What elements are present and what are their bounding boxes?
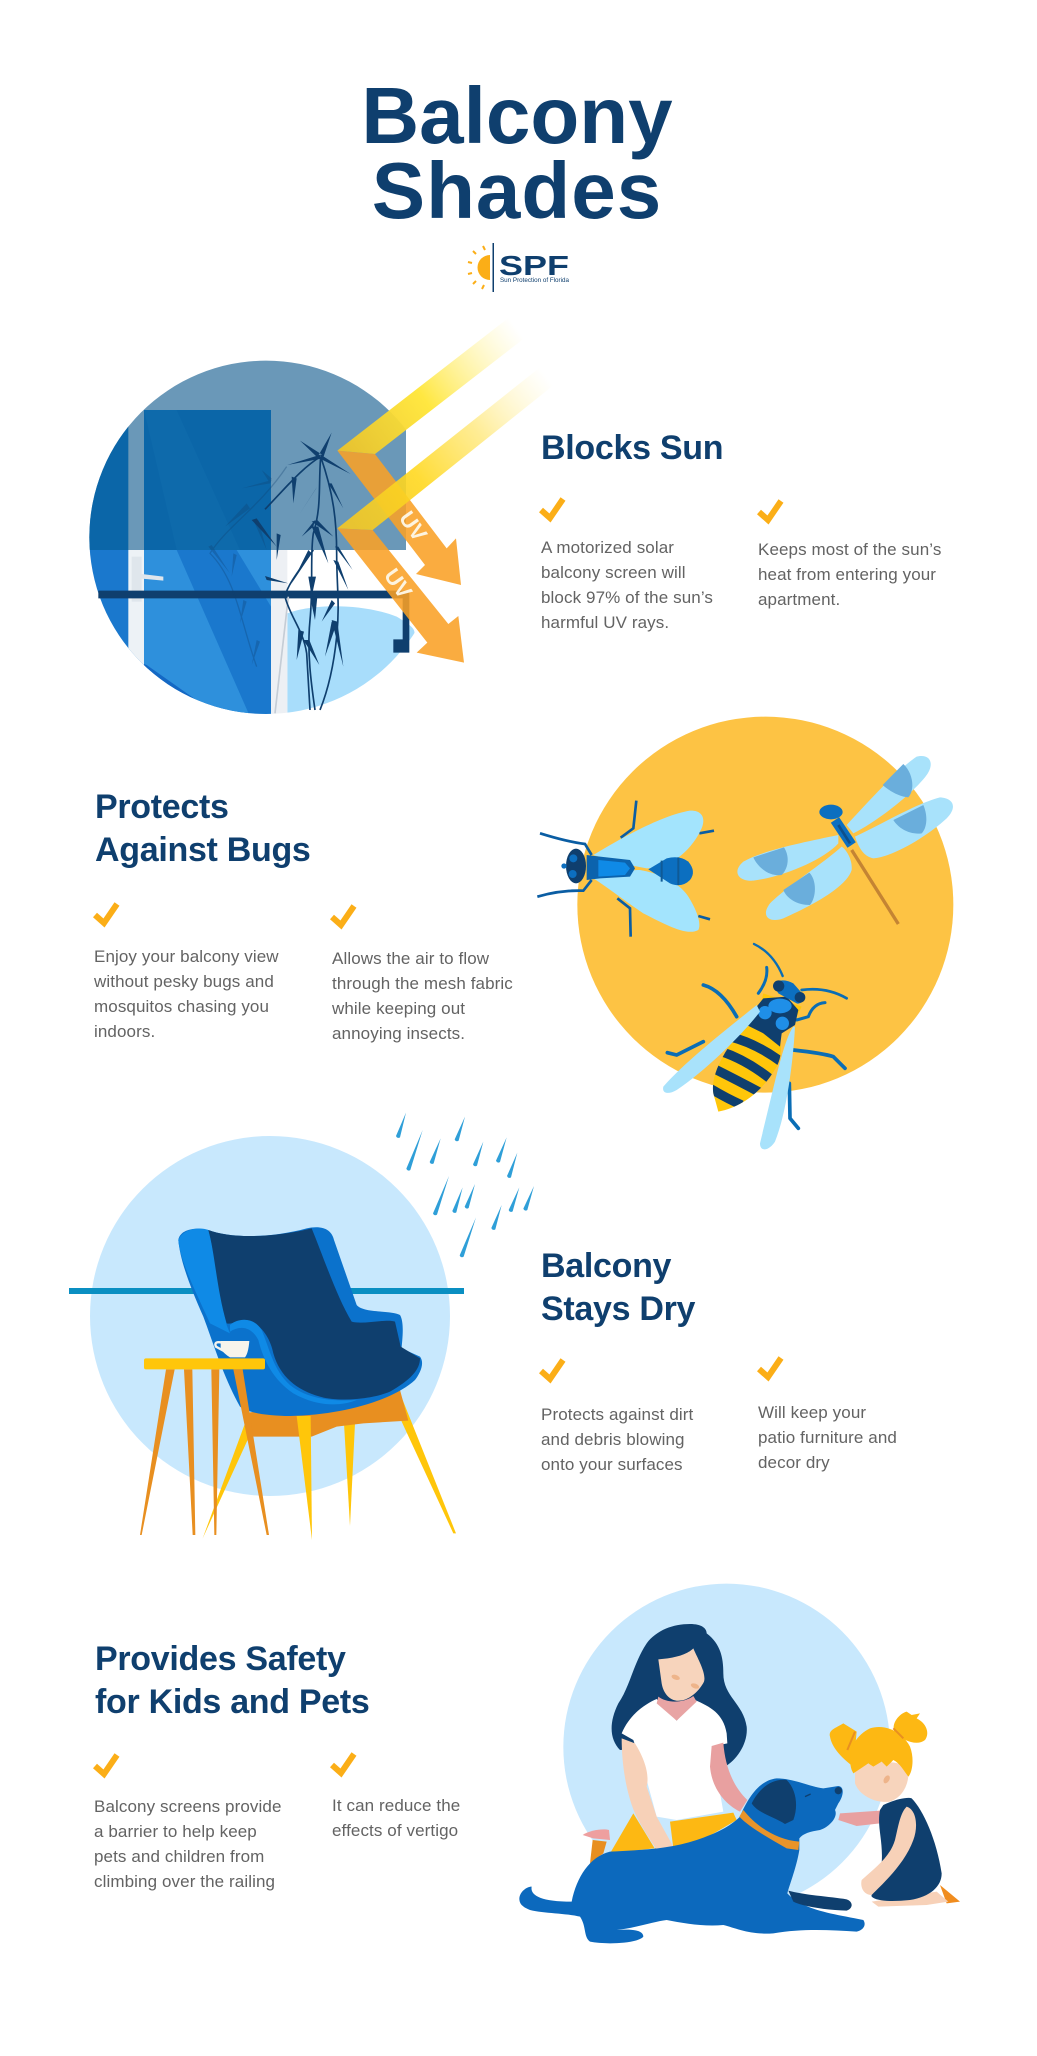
railing bbox=[69, 1288, 464, 1294]
text col 1: onto your surfaces bbox=[541, 1455, 683, 1474]
scene circle bbox=[89, 360, 414, 714]
icon: chair bbox=[178, 1227, 456, 1540]
icon: wasp bbox=[663, 944, 847, 1149]
text col 2: Will keep your bbox=[758, 1403, 866, 1422]
UV arrow 1: UV bbox=[394, 506, 432, 546]
UV arrow 2: UV bbox=[379, 564, 417, 603]
title bbox=[361, 71, 673, 235]
panel: safety illustration bbox=[519, 1584, 960, 1943]
panel: bugs illustration bbox=[537, 717, 953, 1149]
heading: Stays Dry bbox=[541, 1290, 696, 1328]
text col 2: heat from entering your bbox=[758, 565, 936, 584]
text col 2: through the mesh fabric bbox=[332, 974, 513, 993]
text col 1: harmful UV rays. bbox=[541, 613, 669, 632]
text col 2: decor dry bbox=[758, 1453, 830, 1472]
title: Shades bbox=[372, 146, 662, 235]
pale circle bbox=[90, 1136, 450, 1496]
text col 1: balcony screen will bbox=[541, 563, 686, 582]
check 1 bbox=[95, 904, 117, 923]
text col 2: Keeps most of the sun’s bbox=[758, 540, 941, 559]
icon: child bbox=[830, 1712, 960, 1907]
text col 2: while keeping out bbox=[331, 999, 465, 1018]
text col 2: patio furniture and bbox=[758, 1428, 897, 1447]
heading: Protects bbox=[95, 788, 229, 826]
yellow circle bbox=[577, 717, 953, 1093]
panel: blocks sun text bbox=[541, 429, 941, 632]
check 2 bbox=[759, 1358, 781, 1377]
UV arrow 2 bbox=[337, 367, 553, 663]
door handle bbox=[132, 557, 163, 602]
text col 1: indoors. bbox=[94, 1022, 155, 1041]
bamboo bbox=[252, 433, 353, 710]
pale circle bbox=[563, 1584, 890, 1910]
heading: for Kids and Pets bbox=[95, 1683, 370, 1721]
panel: bugs text bbox=[93, 788, 513, 1043]
panel: blocks sun illustration bbox=[80, 317, 553, 720]
text col 1: block 97% of the sun’s bbox=[541, 588, 713, 607]
panel: dry text bbox=[541, 1247, 897, 1474]
icon: fly bbox=[537, 801, 714, 937]
text col 1: without pesky bugs and bbox=[93, 972, 274, 991]
heading: Blocks Sun bbox=[541, 429, 723, 467]
panel: safety text bbox=[94, 1640, 460, 1891]
text col 1: Balcony screens provide bbox=[94, 1797, 282, 1816]
check 2 bbox=[332, 1754, 354, 1773]
text col 1: pets and children from bbox=[94, 1847, 264, 1866]
icon: dog bbox=[519, 1778, 865, 1943]
check 1 bbox=[95, 1755, 117, 1774]
icon: dragonfly bbox=[737, 756, 953, 924]
text col 1: and debris blowing bbox=[541, 1430, 685, 1449]
text col 1: Enjoy your balcony view bbox=[94, 947, 279, 966]
text col 2: apartment. bbox=[758, 590, 840, 609]
logo: SPF: Sun Protection of Florida bbox=[500, 278, 570, 284]
heading: Against Bugs bbox=[95, 831, 311, 869]
text col 1: climbing over the railing bbox=[94, 1872, 275, 1891]
faded bamboo bbox=[208, 467, 287, 667]
title: Balcony bbox=[361, 71, 673, 160]
heading: Provides Safety bbox=[95, 1640, 346, 1678]
text col 1: a barrier to help keep bbox=[94, 1822, 257, 1841]
text col 2: effects of vertigo bbox=[332, 1821, 458, 1840]
pole bbox=[275, 597, 288, 713]
text col 1: mosquitos chasing you bbox=[94, 997, 269, 1016]
text col 1: A motorized solar bbox=[541, 538, 674, 557]
logo: SPF: SPF bbox=[499, 250, 569, 281]
rail bbox=[98, 591, 409, 653]
icon: side table and cup bbox=[140, 1341, 269, 1535]
icon: mother bbox=[583, 1624, 747, 1863]
text col 1: Protects against dirt bbox=[541, 1405, 694, 1424]
text col 2: annoying insects. bbox=[332, 1024, 465, 1043]
check 2 bbox=[759, 501, 781, 520]
UV arrow 1 bbox=[337, 317, 523, 585]
check 2 bbox=[332, 906, 354, 925]
text col 2: Allows the air to flow bbox=[332, 949, 490, 968]
check 1 bbox=[541, 499, 563, 518]
heading: Balcony bbox=[541, 1247, 672, 1285]
panel: dry illustration bbox=[69, 1113, 534, 1540]
logo: SPF bbox=[468, 243, 570, 292]
text col 2: It can reduce the bbox=[332, 1796, 460, 1815]
icon: rain bbox=[396, 1113, 534, 1257]
check 1 bbox=[541, 1360, 563, 1379]
